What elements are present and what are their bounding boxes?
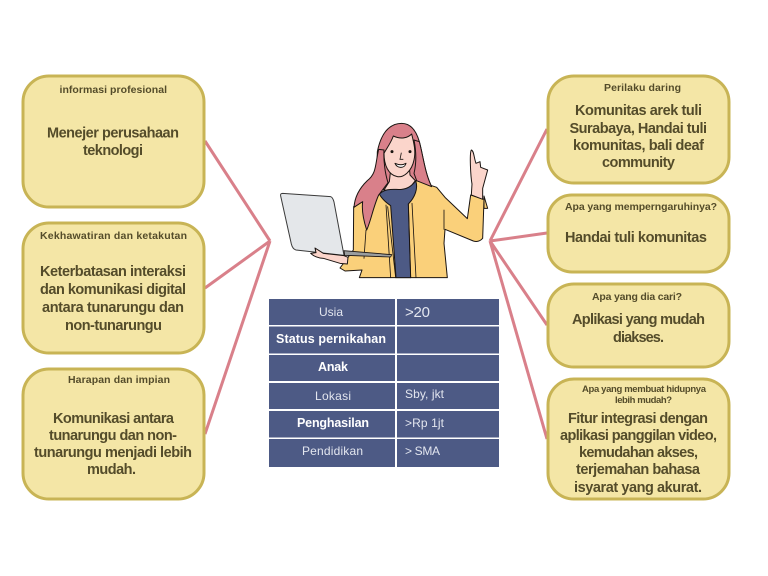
table: demographics xyxy=(269,299,499,467)
panel: Harapan dan impian xyxy=(23,369,204,499)
laptop base xyxy=(344,251,392,257)
row: Penghasilan: Penghasilan xyxy=(297,416,369,430)
scarf and shirt xyxy=(379,181,417,278)
text: what makes life easier: Fitur integrasi dengan xyxy=(568,411,708,427)
text: profession xyxy=(47,126,179,159)
mouth xyxy=(395,163,406,167)
front hair left lock xyxy=(354,149,388,230)
text: hopes: mudah. xyxy=(87,462,136,478)
jacket lapels xyxy=(364,203,444,278)
connector lines: right hub xyxy=(490,129,547,439)
row: Lokasi: Sby, jkt xyxy=(405,387,445,401)
text: online behaviour: Komunitas arek tuli xyxy=(575,103,702,119)
text: what she seeks: Aplikasi yang mudah xyxy=(572,312,705,328)
text: online behaviour xyxy=(570,103,707,171)
row: Pendidikan xyxy=(269,439,499,467)
text: worries xyxy=(40,264,186,334)
panel: Kekhawatiran dan ketakutan xyxy=(23,223,204,353)
heading: Apa yang membuat hidupnya lebih mudah: Apa yang membuat hidupnya xyxy=(582,384,707,395)
heading: Apa yang membuat hidupnya lebih mudah: lebih mudah? xyxy=(615,395,672,406)
illustration: woman with laptop pointing up xyxy=(281,123,488,278)
text: what makes life easier: aplikasi panggilan video, xyxy=(560,428,717,444)
row: Usia: Usia xyxy=(319,305,343,319)
text: what makes life easier xyxy=(560,411,717,496)
row: Penghasilan: >Rp 1jt xyxy=(405,416,445,430)
row: Status pernikahan xyxy=(269,326,499,354)
connector lines: left hub xyxy=(205,141,270,434)
row: Anak xyxy=(269,355,499,381)
jacket xyxy=(340,181,484,278)
row: Usia xyxy=(269,299,499,325)
face xyxy=(384,134,415,177)
text: online behaviour: Surabaya, Handai tuli xyxy=(570,121,707,137)
text: what makes life easier: kemudahan akses, xyxy=(579,445,698,461)
text: online behaviour: komunitas, bali deaf xyxy=(573,138,704,154)
text: online behaviour: community xyxy=(602,155,675,171)
panel: Perilaku daring xyxy=(548,76,729,183)
nose xyxy=(400,153,403,159)
laptop screen xyxy=(281,193,344,255)
holding hand xyxy=(311,248,348,264)
cuff xyxy=(484,196,488,208)
text: profession: teknologi xyxy=(83,143,143,159)
panel: informasi profesional xyxy=(23,76,204,207)
heading: informasi profesional: informasi profesional xyxy=(60,84,167,96)
row: Anak: Anak xyxy=(318,360,348,374)
row: Pendidikan: > SMA xyxy=(405,444,440,458)
row: Status pernikahan: Status pernikahan xyxy=(276,332,386,346)
eyes xyxy=(390,150,411,153)
row: Lokasi: Lokasi xyxy=(315,389,351,403)
text: worries: antara tunarungu dan xyxy=(42,300,184,316)
panel: Apa yang membuat hidupnya lebih mudah xyxy=(548,379,729,499)
heading: Kekhawatiran dan ketakutan: Kekhawatiran dan ketakutan xyxy=(40,230,187,242)
heading: Apa yang dia cari: Apa yang dia cari? xyxy=(592,291,682,303)
heading: Apa yang membuat hidupnya lebih mudah xyxy=(582,384,707,406)
neck xyxy=(384,167,415,192)
back hair xyxy=(377,123,432,190)
text: what she seeks xyxy=(572,312,705,346)
text: worries: dan komunikasi digital xyxy=(40,282,186,298)
text: hopes xyxy=(34,411,192,478)
text: profession: Menejer perusahaan xyxy=(47,126,179,142)
row: Penghasilan xyxy=(269,411,499,438)
front hair right lock xyxy=(414,140,432,187)
pointing hand xyxy=(470,150,488,199)
text: what she seeks: diakses. xyxy=(613,330,664,346)
row: Usia: >20 xyxy=(405,304,430,321)
text: worries: Keterbatasan interaksi xyxy=(40,264,186,280)
text: what makes life easier: isyarat yang akurat. xyxy=(574,480,702,496)
text: hopes: Komunikasi antara xyxy=(53,411,175,427)
text: hopes: tunarungu dan non- xyxy=(49,428,177,444)
heading: Apa yang memperngaruhinya: Apa yang memperngaruhinya? xyxy=(565,201,717,213)
text: hopes: tunarungu menjadi lebih xyxy=(34,445,192,461)
panel: Apa yang dia cari xyxy=(548,284,729,367)
text: worries: non-tunarungu xyxy=(65,318,162,334)
panel: Apa yang memperngaruhinya xyxy=(548,195,729,272)
row: Lokasi xyxy=(269,383,499,409)
heading: Harapan dan impian: Harapan dan impian xyxy=(68,374,170,386)
heading: Perilaku daring: Perilaku daring xyxy=(604,82,681,94)
row: Pendidikan: Pendidikan xyxy=(302,444,363,458)
text: influencers: Handai tuli komunitas xyxy=(565,230,707,246)
text: what makes life easier: terjemahan bahasa xyxy=(576,462,701,478)
